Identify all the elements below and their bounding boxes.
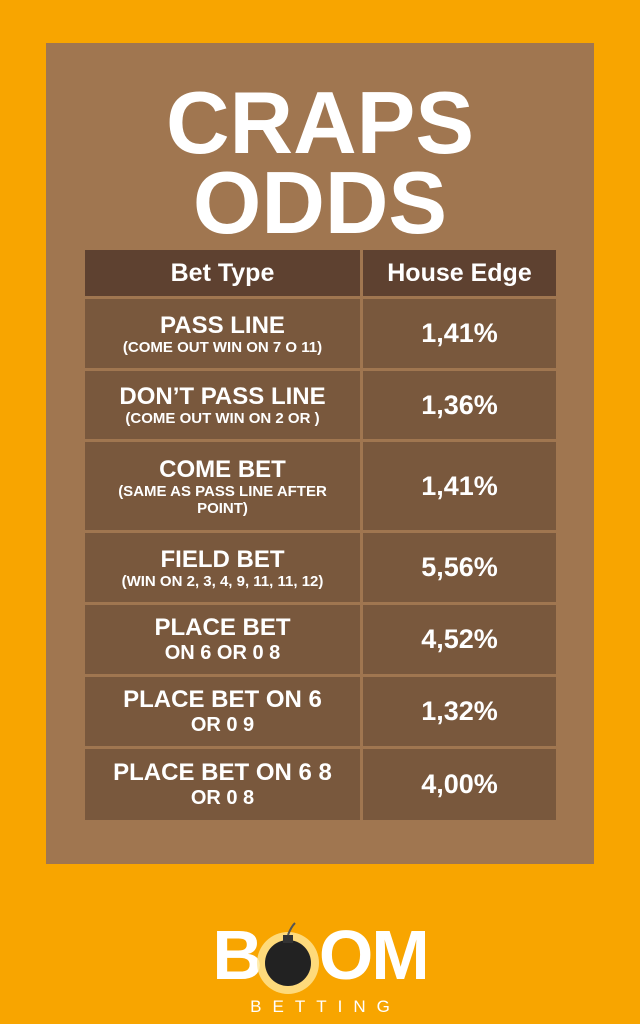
- panel: main: [46, 43, 594, 864]
- title: CRAPS: [166, 73, 474, 172]
- row 5 value: [363, 605, 556, 674]
- row 7 value: 4,00%: [421, 769, 498, 799]
- logo subtext: BETTING: [250, 997, 401, 1016]
- row 3 value: 1,41%: [421, 470, 498, 500]
- row 5 value: 4,52%: [421, 624, 498, 654]
- header: bet type: [85, 250, 360, 296]
- row 4 value: [363, 533, 556, 602]
- row 2 value: [363, 371, 556, 439]
- row 7 label: [85, 749, 360, 820]
- header: house edge: [363, 250, 556, 296]
- row 7 label: PLACE BET ON 6 8: [113, 759, 332, 786]
- row 1 label: [85, 299, 360, 368]
- row 6 label: OR 0 9: [191, 714, 254, 736]
- row 6 value: 1,32%: [421, 696, 498, 726]
- row 1 label: PASS LINE: [160, 312, 285, 338]
- title: [166, 73, 474, 252]
- row 1 value: 1,41%: [421, 318, 498, 348]
- logo: [212, 916, 428, 1016]
- row 4 label: FIELD BET: [160, 546, 284, 572]
- row 3 label: (SAME AS PASS LINE AFTER: [118, 482, 327, 500]
- row 6 label: PLACE BET ON 6: [123, 686, 322, 713]
- row 4 value: 5,56%: [421, 552, 498, 582]
- icon: bomb: [257, 922, 319, 994]
- row 5 label: ON 6 OR 0 8: [165, 642, 280, 664]
- header: bet type: Bet Type: [171, 258, 274, 286]
- row 2 label: DON’T PASS LINE: [119, 383, 326, 410]
- row 3 value: [363, 442, 556, 530]
- row 6 label: [85, 677, 360, 746]
- row 2 label: (COME OUT WIN ON 2 OR ): [125, 410, 320, 427]
- row 1 label: (COME OUT WIN ON 7 O 11): [123, 338, 322, 356]
- header: house edge: House Edge: [387, 258, 532, 286]
- row 7 value: [363, 749, 556, 820]
- row 4 label: [85, 533, 360, 602]
- row 1 value: [363, 299, 556, 368]
- row 3 label: POINT): [197, 500, 248, 516]
- row 2 label: [85, 371, 360, 439]
- row 3 label: COME BET: [159, 456, 286, 482]
- logo wordmark: B OM: [212, 916, 428, 994]
- row 5 label: PLACE BET: [154, 614, 290, 641]
- table: [85, 250, 556, 820]
- row 2 value: 1,36%: [421, 390, 498, 420]
- title: ODDS: [193, 153, 447, 252]
- row 7 label: OR 0 8: [191, 787, 254, 809]
- row 5 label: [85, 605, 360, 674]
- row 4 label: (WIN ON 2, 3, 4, 9, 11, 11, 12): [122, 572, 323, 590]
- row 3 label: [85, 442, 360, 530]
- row 6 value: [363, 677, 556, 746]
